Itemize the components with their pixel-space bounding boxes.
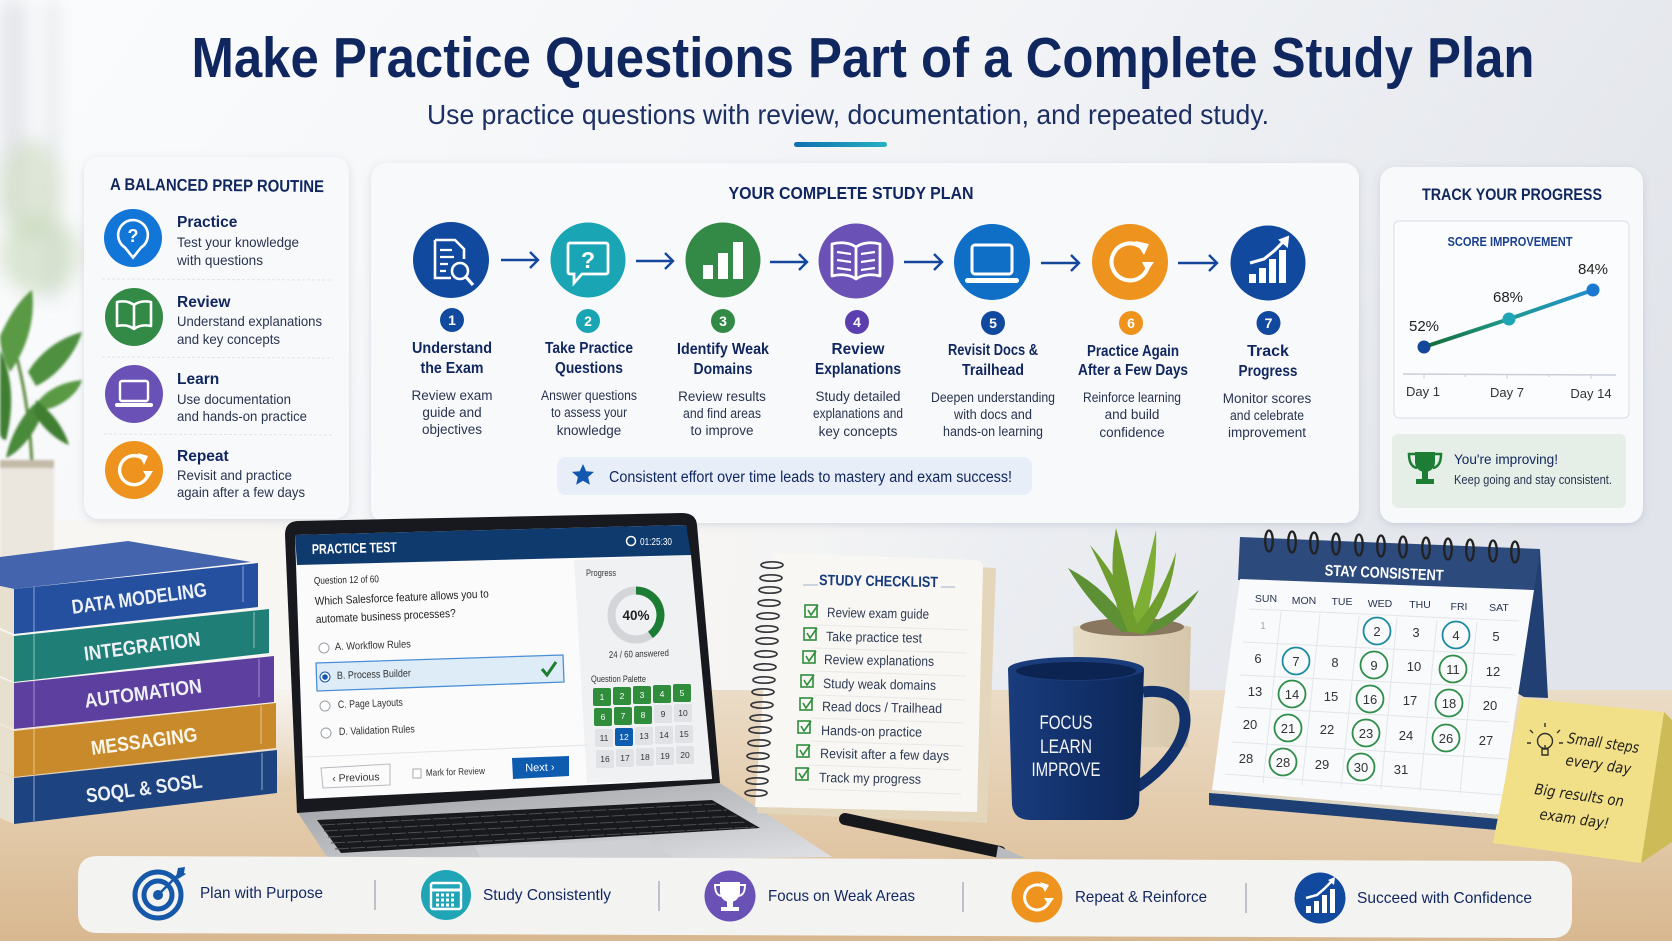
routine: practice: ? [128,226,138,246]
checklist items: Review explanations [824,652,934,669]
weekday labels: SUN [1255,593,1277,605]
step 3: identify weak domains: Review results [678,389,766,404]
step 4: review explanations: Study detailed [816,389,900,404]
step 6: practice again: Reinforce learning [1083,390,1181,405]
routine: learn [105,365,307,424]
progress donut [612,590,660,640]
step 2: take practice questions [541,222,637,438]
step 1: understand the exam: 1 [448,312,456,328]
laptop screen: A. Workflow Rules [335,638,411,653]
calendar dates: 21 [1281,721,1295,736]
checklist heading: STUDY CHECKLIST [819,572,938,591]
calendar dates: 2 [1373,624,1381,639]
step 3: identify weak domains: Domains [694,361,753,378]
question palette [593,684,694,768]
notebook: study checklist [745,553,996,823]
calendar dates: 24 [1399,728,1413,743]
item: study consistently: Study Consistently [483,887,611,904]
callout: you're improving: You're improving! [1454,451,1558,467]
step 6: practice again: Practice Again [1087,343,1179,360]
laptop screen: D. Validation Rules [339,723,415,738]
book: data modeling: DATA MODELING [70,579,208,619]
step 4: review explanations: explanations and [813,406,903,421]
item: succeed with confidence: Succeed with Confidence [1357,890,1532,907]
book: messaging: MESSAGING [90,724,199,760]
laptop screen: automate business processes? [316,608,456,626]
step 5: revisit docs and trailhead: Deepen understanding [931,390,1055,405]
checklist items: Read docs / Trailhead [822,699,942,716]
step 7: track progress: improvement [1228,425,1306,440]
step 2: take practice questions: Take Practice [545,340,633,357]
routine: practice [104,209,299,268]
step 6: practice again: confidence [1099,425,1165,440]
step 7: track progress: Progress [1238,363,1298,380]
line chart: score improvement: Day 1 [1406,384,1440,399]
checklist items: Review exam guide [827,605,929,622]
step 2: take practice questions: Answer questions [541,388,637,403]
laptop screen: C. Page Layouts [338,697,403,711]
step 7: track progress: Monitor scores [1223,391,1312,406]
step 2: take practice questions: knowledge [557,423,621,438]
calendar dates: 23 [1359,726,1373,741]
pen [845,819,1025,858]
question palette: 3 [640,690,645,700]
step 5: revisit docs and trailhead: hands-on learning [943,424,1043,439]
item: succeed with confidence [1294,872,1532,924]
routine: learn: Learn [177,371,219,388]
step 3: identify weak domains: to improve [690,423,754,438]
item: repeat and reinforce: Repeat & Reinforce [1075,889,1207,906]
panel: your complete study plan [371,163,1359,523]
books stack [0,541,277,824]
line chart: score improvement: Day 7 [1490,385,1524,400]
calendar dates: 30 [1354,760,1368,775]
mug: focus learn improve: LEARN [1040,737,1092,758]
checklist items: Take practice test [826,629,922,646]
laptop [285,513,832,863]
calendar heading: STAY CONSISTENT [1324,562,1444,585]
weekday labels: TUE [1332,596,1352,608]
laptop screen: Next › [525,761,555,775]
line chart: score improvement: SCORE IMPROVEMENT [1448,234,1573,249]
calendar dates: 27 [1479,733,1493,748]
routine: repeat [105,441,305,500]
arrow 5 [1041,255,1079,271]
step 1: understand the exam: Review exam [411,388,493,403]
step 5: revisit docs and trailhead: with docs and [953,407,1032,422]
calendar dates: 5 [1492,629,1500,644]
weekday labels: FRI [1451,601,1467,613]
step 5: revisit docs and trailhead: Revisit Docs & [948,342,1038,359]
line chart: score improvement: 68% [1493,289,1523,306]
item: study consistently [421,870,611,920]
step 2: take practice questions: ? [581,247,595,273]
calendar dates: 12 [1486,664,1500,679]
progress heading: TRACK YOUR PROGRESS [1422,185,1602,204]
line chart: score improvement: Day 14 [1570,386,1612,401]
calendar dates: 31 [1394,762,1408,777]
weekday labels: MON [1292,595,1316,607]
question palette: 2 [620,691,625,701]
line chart: score improvement: 84% [1578,261,1608,278]
question palette: 14 [659,730,669,740]
step 1: understand the exam: guide and [422,405,482,420]
laptop screen: PRACTICE TEST [312,539,397,557]
step 7: track progress [1223,226,1312,440]
title: Make Practice Questions Part of a Complete Study Plan [192,26,1534,90]
question palette: 1 [600,692,605,702]
calendar dates: 4 [1452,628,1460,643]
routine: repeat: again after a few days [177,484,305,500]
calendar dates: 26 [1439,731,1453,746]
step 3: identify weak domains: and find areas [683,406,761,421]
calendar dates: 28 [1276,755,1290,770]
routine: learn: and hands-on practice [177,408,307,424]
question palette: 6 [601,712,606,722]
step 2: take practice questions: Questions [555,360,623,377]
progress donut: 40% [622,608,650,623]
calendar dates [1239,621,1500,777]
laptop screen: Mark for Review [426,766,485,779]
routine: repeat: Repeat [177,448,229,465]
line chart: score improvement [1394,221,1629,418]
question palette: 9 [661,709,666,719]
icon: light bulb [1527,723,1563,755]
step 5: revisit docs and trailhead [931,224,1055,439]
calendar dates: 29 [1315,757,1329,772]
panel: a balanced prep routine [84,157,349,519]
calendar dates: 28 [1239,751,1253,766]
book: soql and sosl [14,750,277,824]
item: plan with purpose: Plan with Purpose [200,885,323,902]
book: soql and sosl: SOQL & SOSL [85,771,204,808]
step 5: revisit docs and trailhead: Trailhead [962,362,1024,379]
arrow 2 [636,253,673,269]
question palette: 4 [660,689,665,699]
question palette: 19 [660,751,670,761]
sticky note: every day [1564,751,1633,778]
subtitle: Use practice questions with review, documentation, and repeated study. [427,99,1269,130]
line chart: score improvement: 52% [1409,318,1439,335]
calendar dates: 8 [1331,655,1339,670]
book: integration: INTEGRATION [83,629,202,666]
laptop screen: Question 12 of 60 [314,574,379,587]
checklist items: Track my progress [819,770,921,787]
checklist items: Hands-on practice [821,723,922,740]
sticky note: Big results on [1533,780,1625,810]
calendar dates: 16 [1363,692,1377,707]
step 7: track progress: 7 [1265,315,1273,331]
step 7: track progress: Track [1247,343,1289,360]
step 6: practice again [1078,224,1188,440]
potted plant [1068,528,1199,747]
question palette: 5 [680,688,685,698]
book: automation [14,656,274,729]
question palette: 16 [600,754,610,764]
desk calendar [1209,530,1548,830]
step 3: identify weak domains: 3 [719,313,727,329]
title accent line [794,142,887,147]
plan heading: YOUR COMPLETE STUDY PLAN [728,183,974,203]
checklist items [796,605,949,787]
question palette: 7 [621,711,626,721]
notebook spiral binding [745,562,783,796]
calendar binding rings [1265,530,1519,562]
step 6: practice again: After a Few Days [1078,362,1188,379]
callout: consistent effort [557,457,1032,495]
book: data modeling [14,563,258,634]
step 4: review explanations [813,224,903,439]
item: focus on weak areas: Focus on Weak Areas [768,888,915,905]
laptop screen: ‹ Previous [332,771,380,785]
step 4: review explanations: Review [832,341,885,358]
question palette: 18 [640,752,650,762]
step 1: understand the exam: Understand [412,340,492,357]
step 7: track progress: and celebrate [1230,408,1304,423]
question palette: 8 [641,710,646,720]
callout: you're improving: Keep going and stay consistent. [1454,472,1612,487]
question palette: 10 [678,708,688,718]
callout: you're improving [1392,434,1626,508]
laptop screen: 24 / 60 answered [609,648,669,661]
mug: focus learn improve: FOCUS [1040,713,1092,734]
question palette: 17 [620,753,630,763]
calendar dates: 15 [1324,689,1338,704]
arrow 4 [904,254,942,270]
checklist items: Study weak domains [823,676,936,693]
book: automation: AUTOMATION [83,675,203,713]
weekday labels: SAT [1489,602,1509,614]
step 3: identify weak domains: Identify Weak [677,341,769,358]
sticky note: exam day! [1538,805,1610,833]
step 2: take practice questions: 2 [584,313,592,329]
sticky note [1493,698,1672,863]
selected answer: B. Process Builder [337,667,411,682]
calendar dates: 3 [1412,625,1420,640]
item: plan with purpose [135,867,323,918]
bottom bar [78,856,1572,938]
item: focus on weak areas [704,870,915,922]
question palette: 13 [639,731,649,741]
panel: track your progress [1380,167,1643,523]
weekday labels [1255,593,1509,614]
calendar dates: 1 [1260,621,1266,632]
arrow 3 [770,254,807,270]
routine: practice: with questions [176,252,263,268]
laptop screen: Which Salesforce feature allows you to [315,588,489,608]
panel heading: A BALANCED PREP ROUTINE [110,175,324,196]
arrow 1 [501,252,538,268]
arrow 6 [1178,255,1217,271]
step 1: understand the exam: the Exam [420,360,484,377]
weekday labels: THU [1409,599,1431,611]
sticky note: Small steps [1566,729,1640,757]
step 1: understand the exam [411,222,493,437]
step 4: review explanations: 4 [853,314,861,330]
checklist items: Revisit after a few days [820,746,949,763]
calendar dates: 7 [1292,654,1300,669]
mug: focus learn improve: IMPROVE [1032,760,1100,781]
step 1: understand the exam: objectives [422,422,482,437]
step 3: identify weak domains [677,222,769,438]
laptop screen: Question Palette [591,674,646,685]
calendar dates: 20 [1483,698,1497,713]
routine: practice: Test your knowledge [177,234,299,250]
calendar dates: 9 [1370,658,1378,673]
question palette: 15 [679,729,689,739]
item: repeat and reinforce [1012,872,1207,922]
laptop screen: 01:25:30 [640,536,672,548]
step 2: take practice questions: to assess your [551,405,627,420]
question palette: 20 [680,750,690,760]
calendar dates: 6 [1254,651,1262,666]
routine: review: Review [177,294,231,311]
decorative plant on left [0,290,82,560]
step 4: review explanations: Explanations [815,361,901,378]
routine: review: Understand explanations [177,313,322,329]
calendar dates: 22 [1320,722,1334,737]
routine: review: and key concepts [177,331,280,347]
step 4: review explanations: key concepts [819,424,898,439]
calendar dates: 11 [1446,662,1460,677]
laptop screen: Progress [586,568,616,579]
weekday labels: WED [1368,598,1393,610]
calendar dates: 13 [1248,684,1262,699]
mug: focus learn improve [1008,657,1185,820]
routine: practice: Practice [177,214,238,231]
calendar dates: 20 [1243,717,1257,732]
routine: review [105,288,322,347]
calendar dates: 14 [1285,687,1299,702]
calendar dates: 10 [1407,659,1421,674]
step 5: revisit docs and trailhead: 5 [989,315,997,331]
routine: repeat: Revisit and practice [177,467,292,483]
step 6: practice again: and build [1105,407,1159,422]
laptop screen [295,525,712,799]
step 6: practice again: 6 [1127,315,1135,331]
calendar dates: 18 [1442,696,1456,711]
book: integration [14,609,269,682]
marked date circles [1270,618,1470,780]
routine: learn: Use documentation [177,391,291,407]
calendar dates: 17 [1403,693,1417,708]
question palette: 11 [600,733,609,743]
book: messaging [14,703,276,777]
selected answer [316,655,564,691]
callout: consistent effort: Consistent effort over time leads to mastery and exam success! [609,469,1012,486]
question palette: 12 [619,732,629,742]
